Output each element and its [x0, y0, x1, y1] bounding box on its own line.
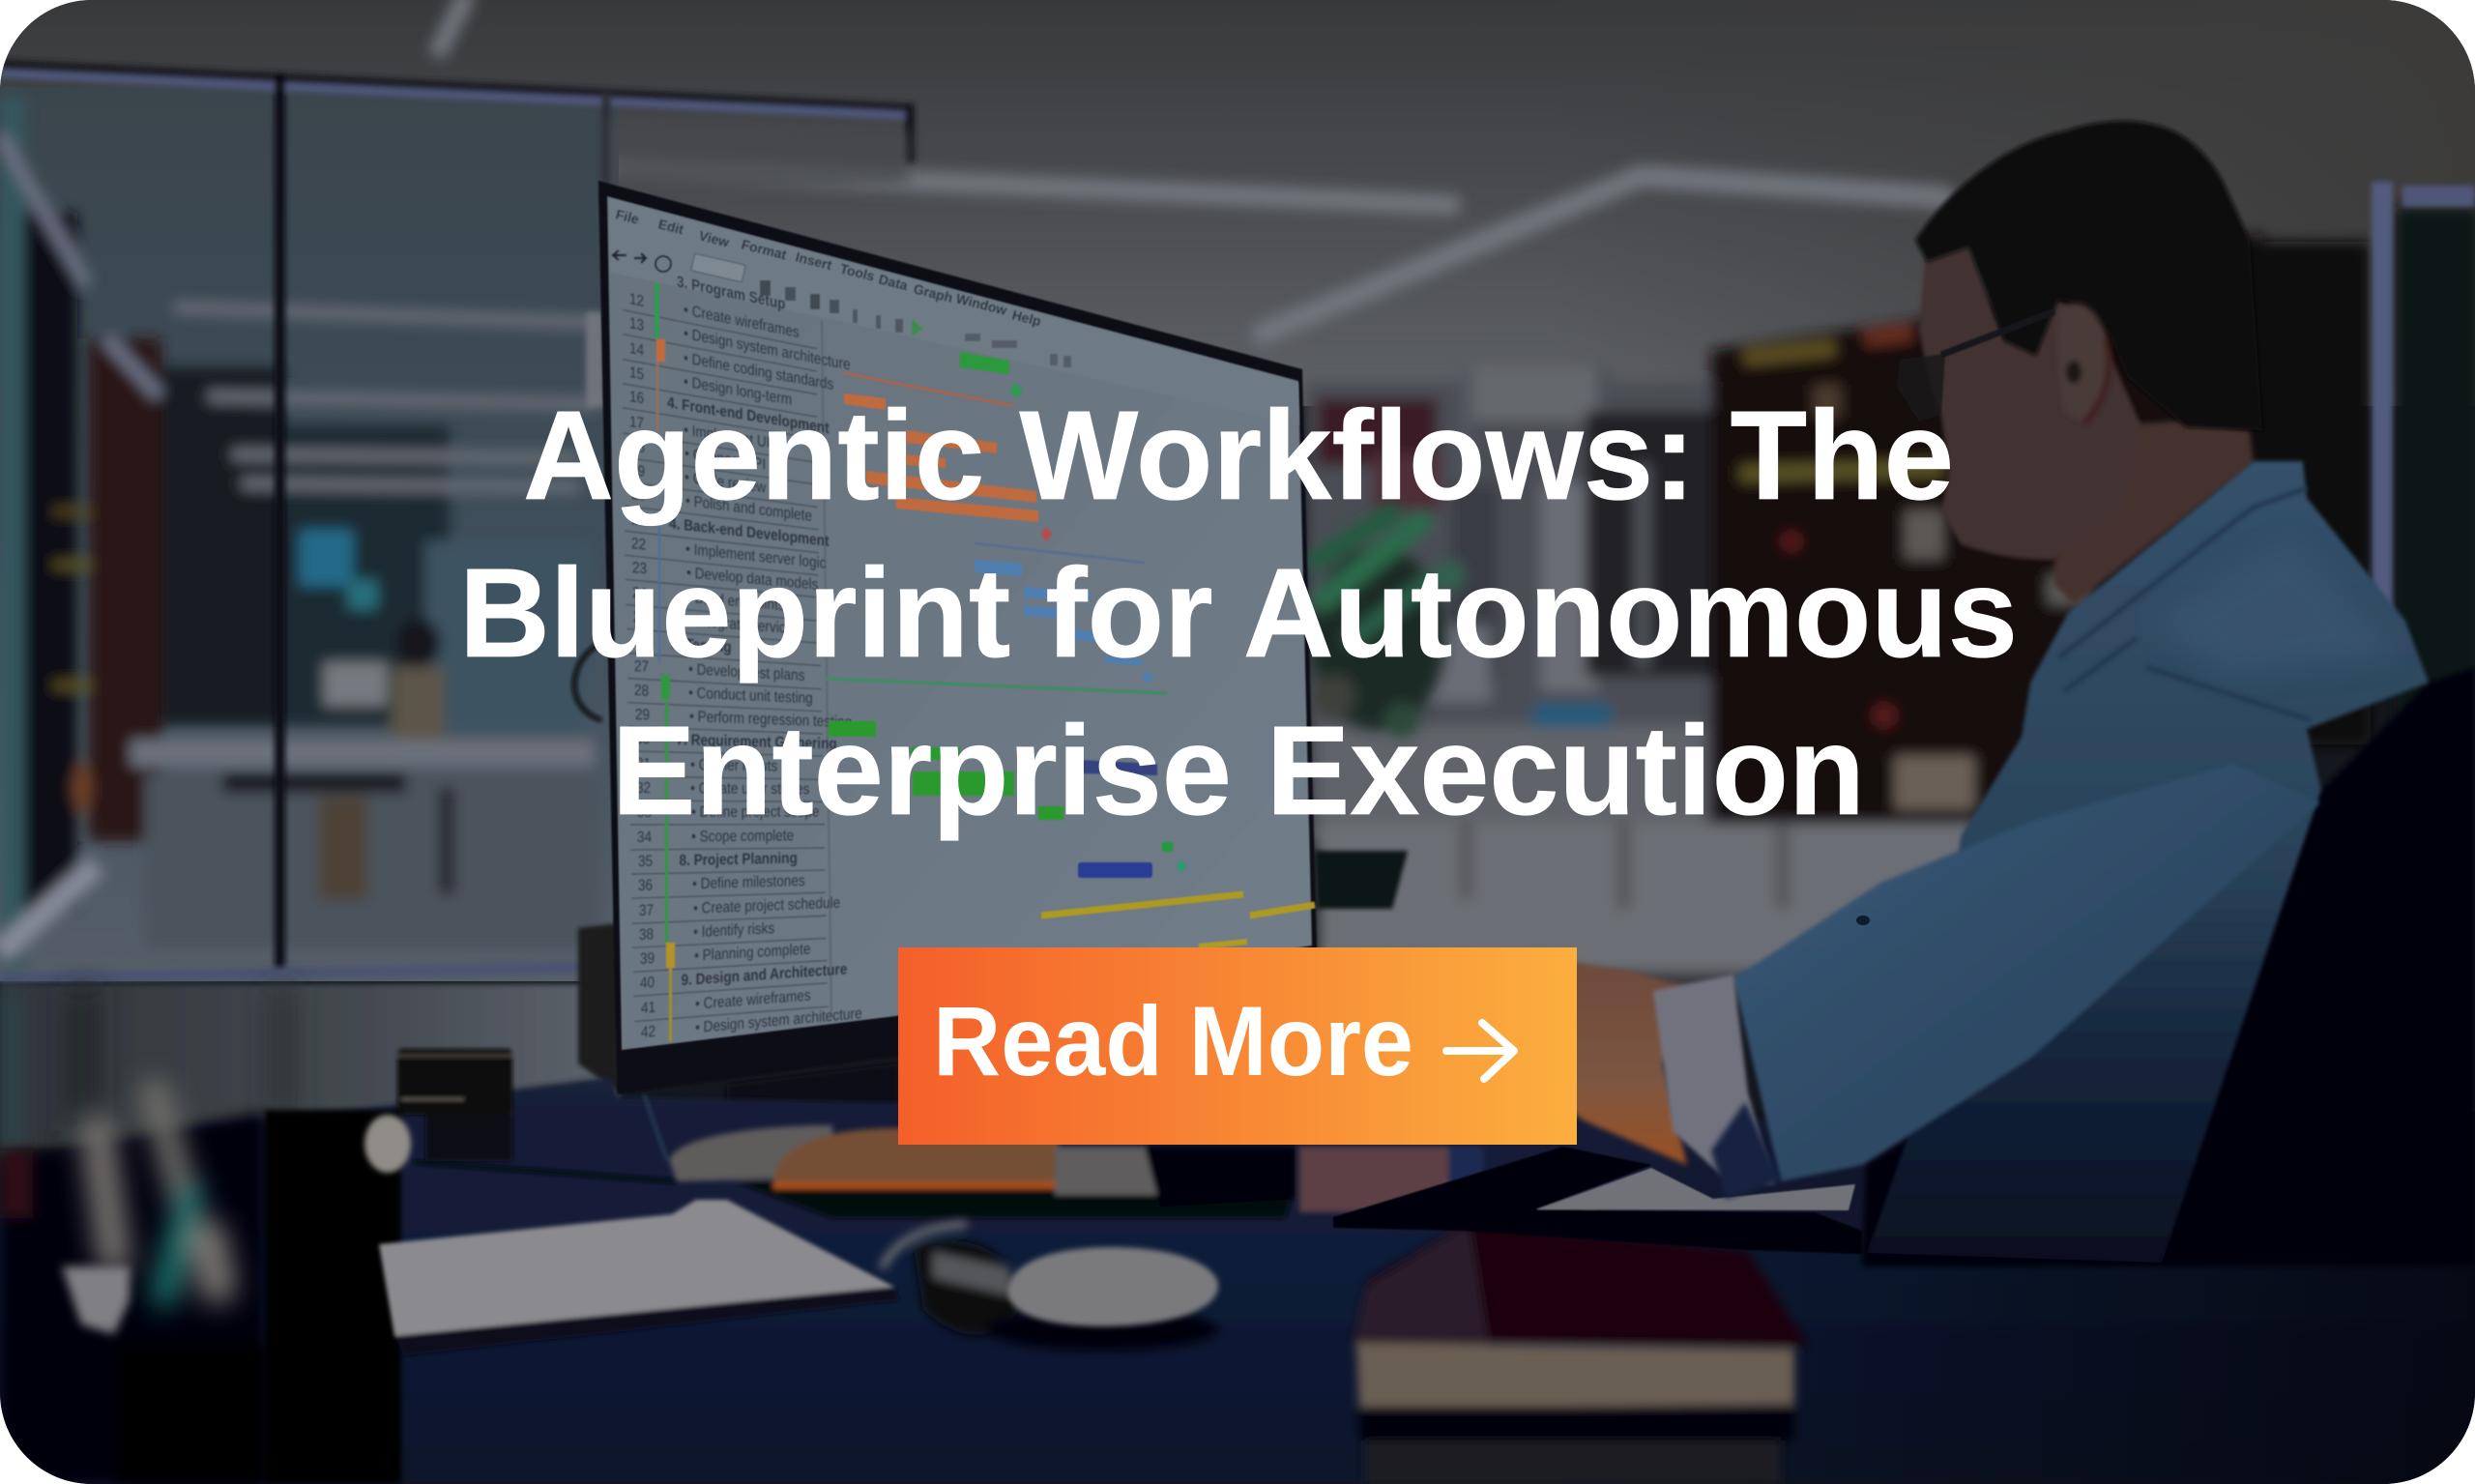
spreadsheet rows: • Connect API	[684, 446, 766, 474]
monitor	[574, 181, 1317, 1127]
spreadsheet rows: 40	[640, 975, 655, 992]
dark cabinet	[1586, 411, 1711, 677]
spreadsheet rows: • Create wireframes	[684, 301, 800, 341]
sleeve button	[1856, 916, 1870, 925]
spreadsheet rows: 7. Requirement Gathering	[677, 732, 837, 753]
monitor side object	[586, 312, 604, 407]
monitor stand foot	[727, 1063, 899, 1127]
spreadsheet rows: • Conduct unit testing	[688, 685, 813, 708]
mouse	[1007, 1247, 1218, 1326]
right pillar	[2372, 182, 2475, 617]
spreadsheet rows: 24	[632, 585, 647, 603]
hair	[1915, 121, 2262, 430]
status strip	[655, 282, 675, 1041]
spreadsheet rows: 39	[640, 950, 655, 968]
spreadsheet rows: • Define project scope	[691, 804, 819, 821]
spreadsheet rows: • Polish and complete	[685, 493, 812, 525]
title: Blueprint for Autonomous	[459, 541, 2018, 684]
spreadsheet rows: 3. Program Setup	[677, 273, 785, 313]
spreadsheet rows: 29	[635, 707, 650, 724]
title	[459, 384, 2018, 841]
spreadsheet rows: 28	[634, 683, 649, 700]
spreadsheet rows: • Implement server logic	[685, 541, 827, 572]
ear	[2057, 304, 2109, 423]
brown panel	[1299, 1147, 1448, 1212]
right background	[1305, 182, 2475, 996]
icon: arrow	[1446, 1023, 1514, 1079]
spreadsheet rows: • Develop test plans	[688, 661, 804, 684]
desk right shade	[0, 1112, 2475, 1484]
spreadsheet rows: 30	[635, 731, 650, 748]
spreadsheet rows: • Create project schedule	[693, 895, 840, 917]
phone and cable	[882, 1224, 1025, 1335]
spreadsheet rows: • Implement UI	[684, 422, 770, 451]
menu bar: Window	[954, 290, 1008, 318]
red blur at the edge	[0, 1150, 33, 1218]
spreadsheet rows: 8. Project Planning	[680, 851, 798, 869]
desk seam	[414, 1162, 677, 1181]
menu bar: Insert	[794, 248, 833, 273]
spreadsheet rows: • Perform regression testing	[689, 709, 852, 732]
button label: Read More	[933, 986, 1413, 1096]
spreadsheet rows: 4. Back-end Development	[669, 515, 830, 550]
monitor wire	[644, 1094, 667, 1160]
spreadsheet rows: • Design system architecture	[695, 1005, 862, 1036]
glass office left	[0, 64, 915, 981]
neck	[2054, 421, 2254, 604]
shelf	[1711, 232, 2262, 831]
dark corner behind the head	[2248, 242, 2371, 744]
spreadsheet rows: 19	[630, 462, 645, 480]
floor reflections	[0, 986, 294, 1160]
spreadsheet rows: 9. Design and Architecture	[681, 961, 847, 989]
spreadsheet rows: 31	[636, 756, 651, 773]
spreadsheet rows: • Define coding standards	[684, 349, 833, 393]
title: Enterprise Execution	[612, 699, 1865, 841]
black puck	[397, 1049, 512, 1161]
book	[1354, 1221, 1808, 1484]
pad shadow	[735, 1181, 1296, 1218]
spreadsheet rows: 13	[629, 314, 644, 335]
spreadsheet rows: • Scope complete	[691, 828, 794, 846]
spreadsheet rows: • Build endpoints	[686, 590, 785, 615]
spreadsheet rows: 20	[631, 486, 646, 505]
spreadsheet rows	[623, 273, 862, 1041]
menu bar: Data	[877, 271, 910, 293]
screen content	[609, 198, 1315, 1041]
menu bar	[614, 206, 1043, 329]
spreadsheet rows: • Integrate services	[687, 613, 800, 638]
spreadsheet rows: 36	[638, 878, 653, 894]
spreadsheet rows: 4. Front-end Development	[667, 393, 830, 437]
plant pot	[1315, 851, 1408, 909]
spreadsheet rows: 14	[629, 339, 644, 360]
spreadsheet rows: • Design system architecture	[684, 325, 851, 374]
spreadsheet rows: • Code review	[684, 470, 766, 497]
cuff	[1653, 975, 1774, 1184]
white bench	[1315, 721, 1709, 826]
spreadsheet rows: 32	[636, 780, 651, 797]
spreadsheet rows: 38	[639, 926, 654, 944]
dark red wall patch	[1317, 398, 1438, 466]
shirt torso	[1867, 461, 2429, 1263]
spreadsheet rows: 42	[641, 1024, 655, 1041]
spreadsheet rows: 37	[639, 902, 654, 919]
spreadsheet rows: • Design long-term	[684, 373, 792, 409]
spreadsheet rows: 22	[631, 536, 646, 554]
left desk shadow	[0, 1112, 265, 1484]
monitor frame	[598, 181, 1317, 1094]
light column	[1541, 483, 1597, 691]
menu bar: File	[614, 206, 641, 227]
menu bar: Tools	[838, 260, 877, 284]
spreadsheet rows: 18	[630, 438, 645, 456]
plant	[1310, 512, 1466, 738]
sleeve	[1733, 764, 2320, 1181]
lintel	[1472, 367, 1598, 421]
shoulder highlight	[2156, 541, 2398, 677]
spreadsheet rows: 41	[641, 1000, 655, 1017]
spreadsheet rows: 23	[632, 560, 647, 578]
glasses	[1897, 311, 2054, 422]
read more button	[898, 947, 1577, 1145]
spreadsheet rows: • Identify risks	[693, 920, 774, 942]
toolbar icons	[613, 250, 1071, 367]
gantt chart	[827, 352, 1315, 946]
ceiling right shade	[1763, 0, 2475, 406]
blurred back office	[0, 97, 599, 967]
spreadsheet rows: 25	[633, 609, 648, 626]
spreadsheet rows: 12	[629, 290, 644, 310]
desk	[0, 1077, 2475, 1484]
laptop under hand	[1333, 1147, 1862, 1254]
spreadsheet rows: 15	[629, 364, 644, 384]
floor	[0, 984, 619, 1149]
spreadsheet rows: • Define milestones	[692, 873, 805, 893]
ceiling light strips	[425, 0, 1957, 347]
spreadsheet rows: 27	[634, 658, 649, 676]
notebook	[379, 1200, 899, 1355]
spreadsheet rows: • Gather inputs	[690, 757, 777, 775]
spreadsheet rows: 5. Testing	[671, 636, 732, 656]
menu bar: View	[697, 227, 731, 250]
spreadsheet rows: 16	[629, 388, 644, 408]
spreadsheet rows: • Planning complete	[694, 942, 810, 965]
spreadsheet rows: 33	[637, 804, 652, 821]
spreadsheet rows: • Create wireframes	[695, 988, 811, 1013]
face	[1919, 247, 2141, 560]
spreadsheet rows: 26	[633, 633, 648, 651]
spreadsheet rows: 34	[637, 829, 652, 846]
list and chart divider	[822, 321, 831, 1015]
menu bar: Help	[1010, 306, 1043, 329]
ceiling	[0, 0, 2475, 406]
spreadsheet rows: 21	[631, 511, 646, 530]
title: Agentic Workflows: The	[523, 384, 1954, 526]
spreadsheet rows: 17	[629, 414, 644, 433]
shirt collar detail	[2059, 488, 2311, 720]
pen cup and pens	[0, 1092, 411, 1484]
spreadsheet rows: • Create user stories	[690, 780, 809, 799]
spreadsheet rows: • Develop data models	[686, 565, 818, 594]
chair	[1862, 667, 2475, 1266]
monitor stand block	[578, 923, 619, 1092]
sleeve hem shade	[1711, 1102, 1781, 1199]
wall	[1305, 382, 1721, 846]
mouse shadow	[986, 1308, 1218, 1351]
cable loop	[574, 643, 601, 720]
upper glass right pane	[615, 130, 913, 189]
sleeve pad	[669, 1125, 1483, 1218]
glass frame	[0, 64, 915, 978]
screen	[607, 196, 1312, 1050]
toolbar band	[609, 198, 1299, 425]
menu bar: Graph	[912, 280, 954, 306]
hand	[1571, 962, 1702, 1165]
menu bar: Edit	[656, 216, 685, 237]
menu bar: Format	[740, 236, 789, 262]
person	[1571, 121, 2475, 1266]
spreadsheet rows: 35	[638, 854, 653, 870]
